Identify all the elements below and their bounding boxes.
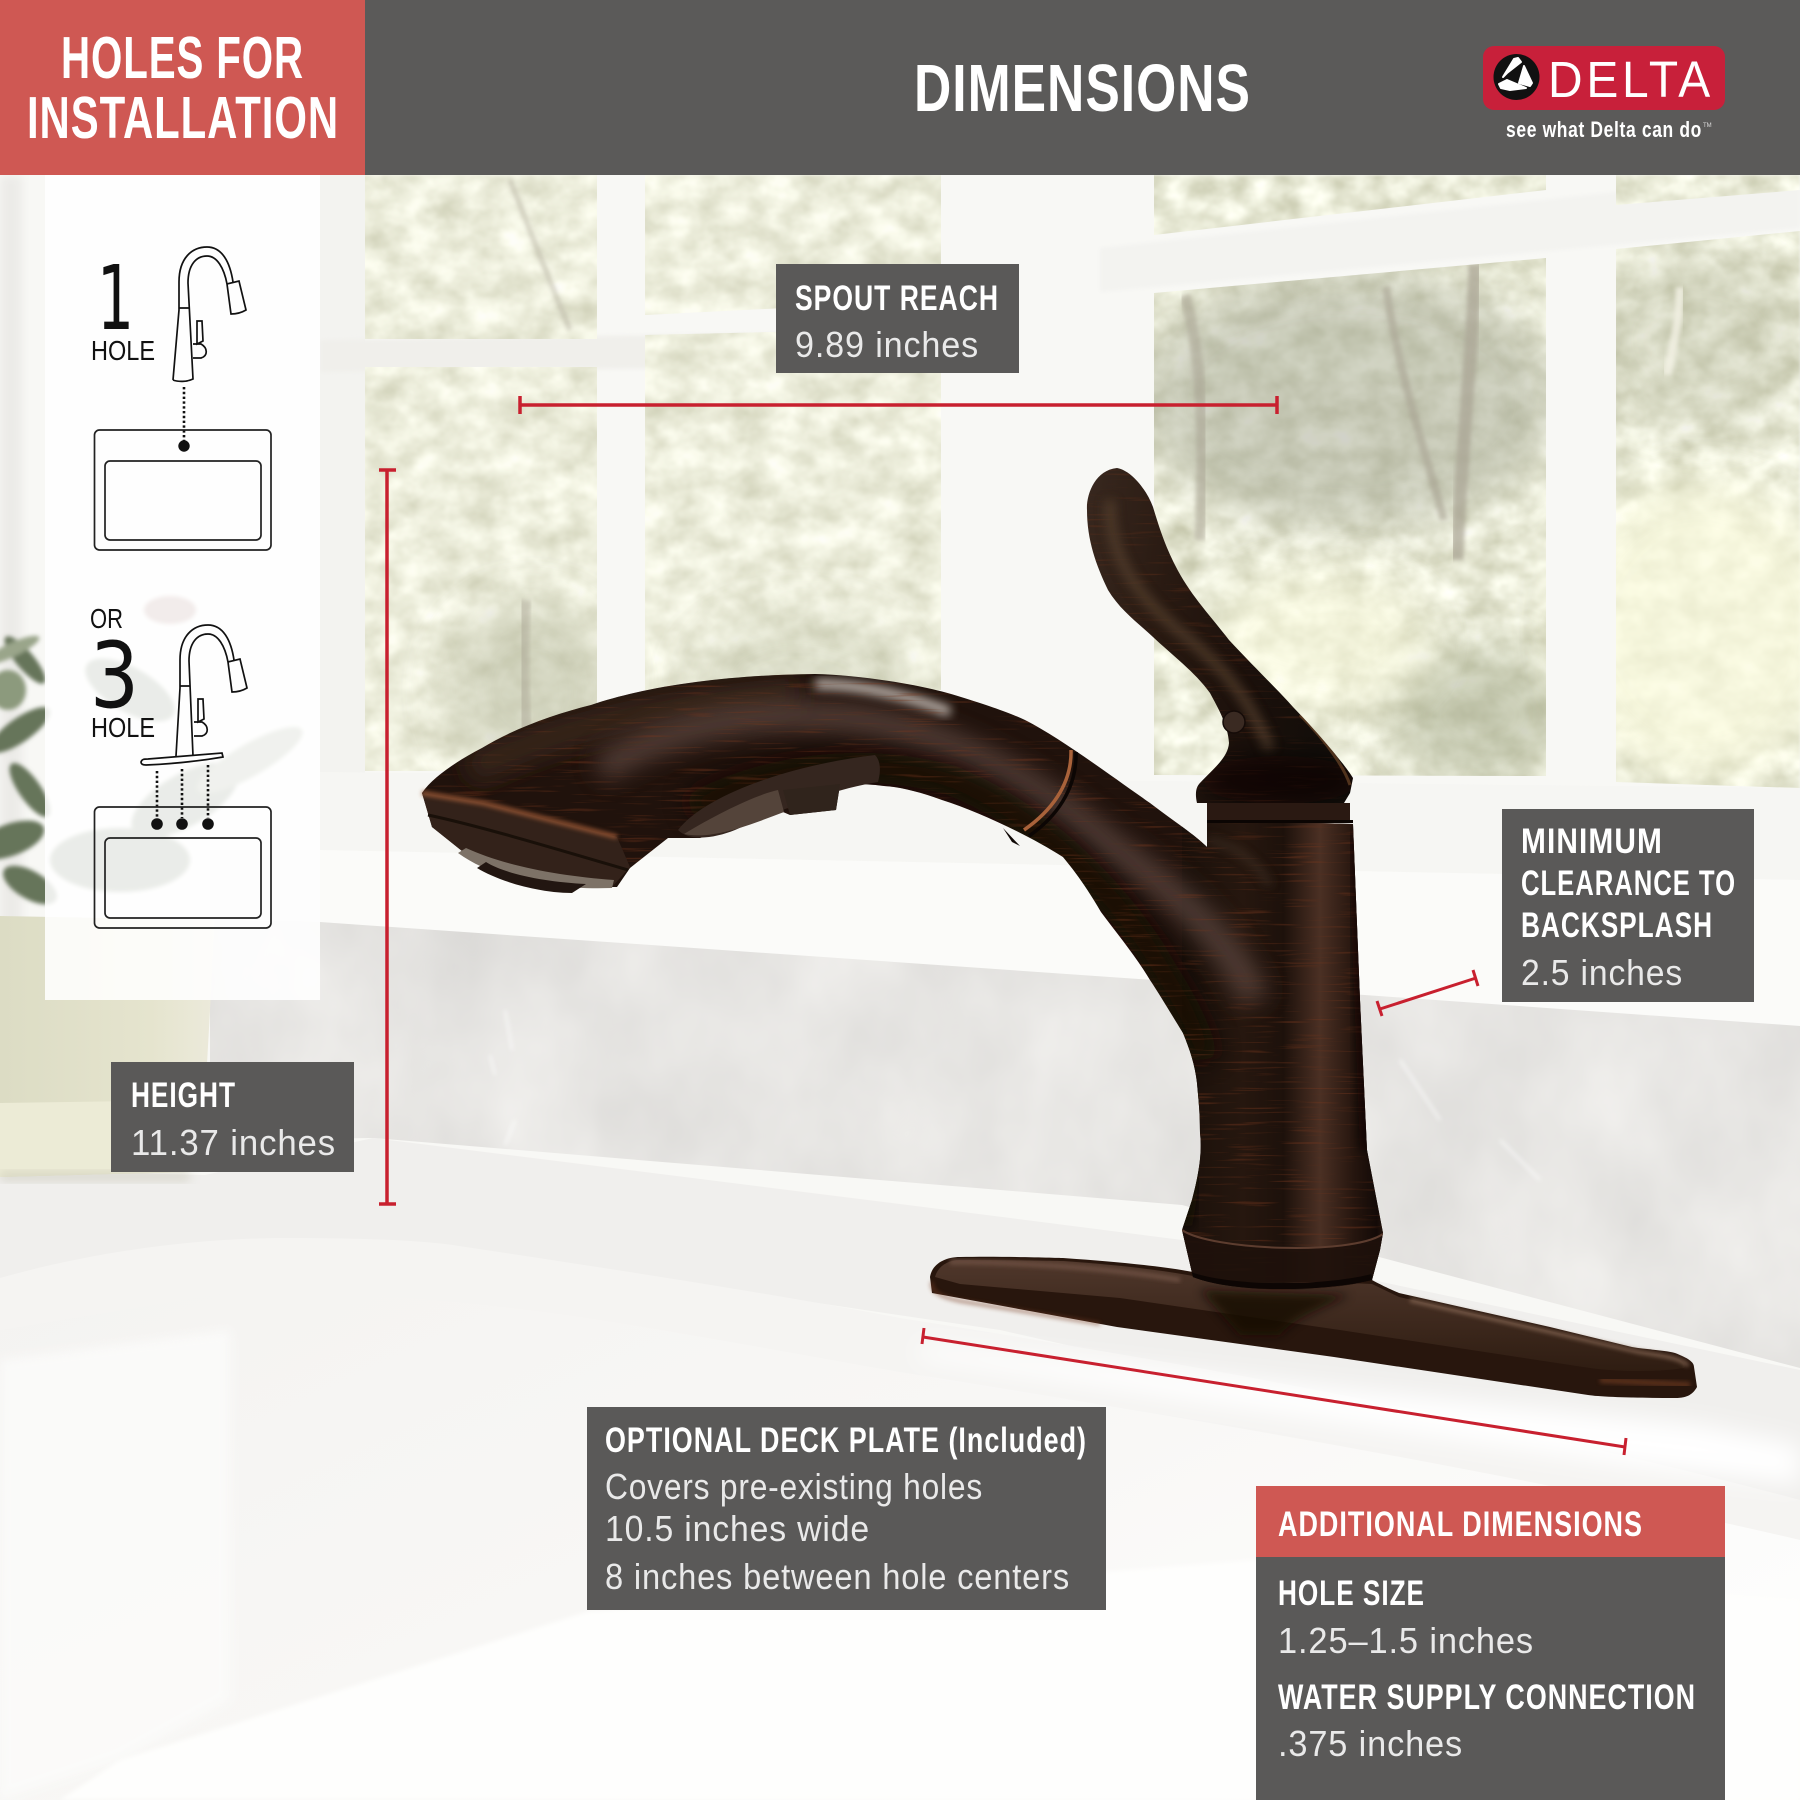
three-hole diagram: 3 <box>90 624 139 729</box>
panel: additional dimensions: 1.25–1.5 inches <box>1278 1620 1534 1661</box>
panel: additional dimensions <box>1256 1486 1725 1800</box>
faucet photo <box>420 460 1697 1398</box>
spout and body <box>420 670 1390 1300</box>
deck plate <box>930 1257 1697 1398</box>
logo: Delta: see what Delta can do <box>1506 117 1702 142</box>
callout: optional deck plate: Covers pre-existing holes <box>605 1466 983 1507</box>
header: holes for installation <box>0 0 365 175</box>
sill <box>320 772 1800 880</box>
sink rim <box>0 1238 1800 1800</box>
panel: holes diagram <box>45 175 320 1000</box>
header: holes for installation: HOLES FOR <box>61 25 304 91</box>
callout: minimum clearance: BACKSPLASH <box>1521 906 1713 945</box>
spray lever <box>678 755 880 838</box>
marble <box>200 910 1800 1380</box>
header: holes for installation: INSTALLATION <box>27 85 339 151</box>
three-hole diagram <box>90 603 271 928</box>
callout: height: HEIGHT <box>131 1076 236 1115</box>
callout: optional deck plate <box>587 1407 1106 1610</box>
panel: additional dimensions: HOLE SIZE <box>1278 1574 1425 1613</box>
plant and pot <box>0 596 310 1181</box>
one-hole diagram: HOLE <box>91 335 155 366</box>
copper ring <box>1024 750 1071 830</box>
callout: spout reach <box>776 264 1019 373</box>
callout: optional deck plate: OPTIONAL DECK PLATE (Included) <box>605 1421 1087 1460</box>
callout: minimum clearance <box>1502 809 1754 1002</box>
three-hole diagram: OR <box>90 603 123 634</box>
height measure line <box>379 470 396 1205</box>
callout: optional deck plate: 10.5 inches wide <box>605 1508 870 1549</box>
callout: height: 11.37 inches <box>131 1122 336 1163</box>
callout: optional deck plate: 8 inches between hole centers <box>605 1556 1070 1597</box>
panel: additional dimensions: ADDITIONAL DIMENSIONS <box>1278 1505 1643 1544</box>
title: DIMENSIONS <box>914 51 1251 126</box>
callout: minimum clearance: MINIMUM <box>1521 822 1663 861</box>
callout: spout reach: 9.89 inches <box>795 324 979 365</box>
spray head face <box>422 793 630 887</box>
one-hole diagram: 1 <box>97 246 134 350</box>
handle <box>1080 460 1360 823</box>
callout: minimum clearance: 2.5 inches <box>1521 952 1683 993</box>
three-hole diagram: HOLE <box>91 712 155 743</box>
counter <box>0 1138 1800 1510</box>
callout: spout reach: SPOUT REACH <box>795 279 999 318</box>
backsplash clearance measure line <box>1377 970 1478 1016</box>
one-hole diagram <box>91 246 271 550</box>
callout: height <box>111 1062 354 1172</box>
panel: additional dimensions: .375 inches <box>1278 1723 1463 1764</box>
deck plate measure line <box>922 1328 1626 1455</box>
logo: Delta: TM <box>1703 123 1712 129</box>
spout reach measure line <box>520 396 1277 414</box>
header bar: dark band <box>365 0 1800 175</box>
logo: Delta <box>1483 46 1725 142</box>
logo: Delta: DELTA <box>1548 51 1714 108</box>
